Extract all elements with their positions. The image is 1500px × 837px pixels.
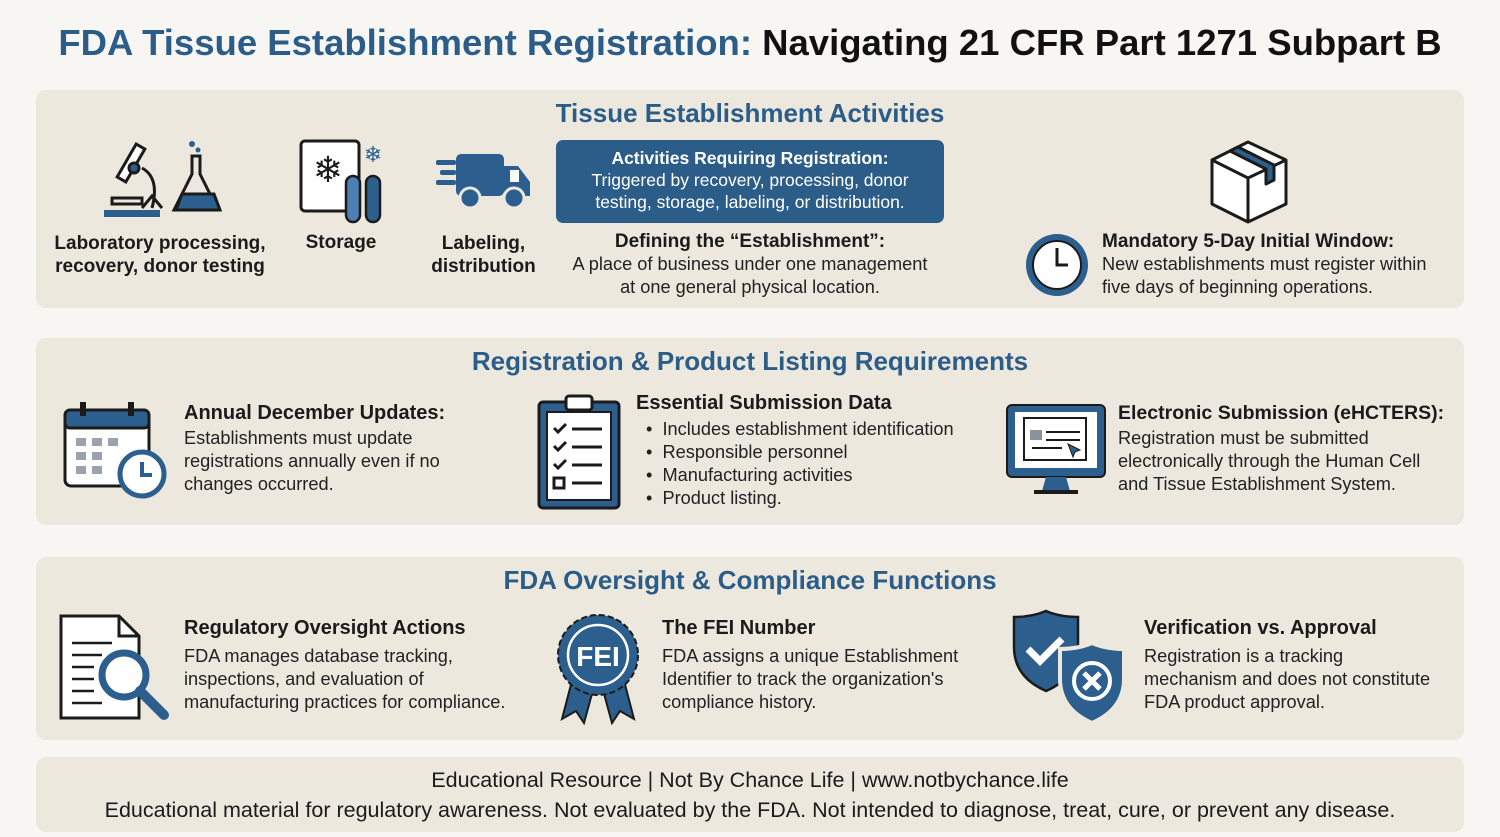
- text: FEI number: compliance history.: [662, 692, 816, 712]
- panel: tissue establishment activities: [36, 90, 1464, 308]
- label: labeling: [431, 233, 536, 277]
- text: 5-day window: New establishments must register within: [1102, 254, 1426, 274]
- callout: activities requiring registration: Activities Requiring Registration:: [611, 148, 889, 168]
- text: annual december updates: registrations annually even if no: [184, 451, 440, 471]
- callout: activities requiring registration: [556, 140, 944, 223]
- footer: Educational material for regulatory awareness. Not evaluated by the FDA. Not intended to diagnose, treat, cure, or prevent any disease.: [105, 798, 1395, 822]
- icon: storage freezer: [300, 140, 382, 224]
- text: essential submission data: • Includes establishment identification: [646, 419, 954, 439]
- text: verification vs approval: FDA product approval.: [1144, 692, 1325, 712]
- title: FDA Tissue Establishment Registration: Navigating 21 CFR Part 1271 Subpart B: [58, 22, 1442, 63]
- label: labeling: Labeling,: [442, 233, 525, 254]
- icon: delivery truck: [436, 154, 530, 206]
- icon: FEI badge: [557, 614, 639, 725]
- text: regulatory oversight actions: [184, 617, 505, 712]
- icon: shields check and cross: [1012, 610, 1122, 721]
- footer: [36, 757, 1464, 832]
- text: 5-day window: Mandatory 5-Day Initial Window:: [1102, 231, 1394, 252]
- text: regulatory oversight actions: inspections, and evaluation of: [184, 669, 424, 689]
- text: annual december updates: [184, 402, 445, 494]
- text: verification vs approval: mechanism and does not constitute: [1144, 669, 1430, 689]
- text: annual december updates: changes occurred.: [184, 474, 334, 494]
- label: laboratory: [54, 233, 266, 277]
- text: verification vs approval: Verification vs. Approval: [1144, 617, 1377, 639]
- text: electronic submission: [1118, 402, 1444, 494]
- label: labeling: distribution: [431, 256, 536, 277]
- text: annual december updates: Annual December Updates:: [184, 402, 445, 424]
- text: 5-day window: five days of beginning operations.: [1102, 277, 1373, 297]
- text: essential submission data: [636, 392, 954, 508]
- icon: clock: [1026, 234, 1088, 296]
- text: verification vs approval: [1144, 617, 1430, 712]
- icon: computer monitor: [1006, 404, 1106, 494]
- text: essential submission data: Essential Submission Data: [636, 392, 892, 414]
- text: electronic submission: electronically through the Human Cell: [1118, 451, 1420, 471]
- panel: FDA oversight & compliance: [36, 557, 1464, 740]
- text: regulatory oversight actions: Regulatory Oversight Actions: [184, 617, 466, 639]
- icon: microscope and flask: [104, 141, 222, 217]
- text: FEI number: Identifier to track the organization's: [662, 669, 944, 689]
- text: FEI number: [662, 617, 958, 712]
- icon: document with magnifier: [60, 614, 169, 720]
- heading: FDA Oversight & Compliance Functions: [503, 565, 997, 595]
- callout: activities requiring registration: Triggered by recovery, processing, donor: [591, 170, 909, 190]
- text: defining establishment: [572, 231, 928, 297]
- text: defining establishment: A place of business under one management: [573, 254, 927, 274]
- label: laboratory: Laboratory processing,: [54, 233, 266, 254]
- footer: Educational Resource | Not By Chance Life | www.notbychance.life: [431, 768, 1069, 792]
- text: essential submission data: • Product listing.: [646, 488, 782, 508]
- text: electronic submission: Registration must be submitted: [1118, 428, 1369, 448]
- icon: clipboard checklist: [538, 394, 620, 510]
- label: storage: Storage: [306, 232, 376, 253]
- text: 5-day window: [1102, 231, 1426, 297]
- panel: registration & product listing: [36, 338, 1464, 525]
- text: regulatory oversight actions: FDA manages database tracking,: [184, 646, 453, 666]
- text: FEI number: FDA assigns a unique Establishment: [662, 646, 958, 666]
- icon: FEI badge: FEI: [576, 641, 620, 672]
- text: annual december updates: Establishments must update: [184, 428, 412, 448]
- icon: box: [1210, 140, 1288, 224]
- label: laboratory: recovery, donor testing: [55, 256, 265, 277]
- text: defining establishment: at one general physical location.: [620, 277, 880, 297]
- icon: calendar: [64, 402, 166, 498]
- icon: storage freezer: ❄: [364, 142, 382, 167]
- text: FEI number: The FEI Number: [662, 617, 815, 639]
- text: electronic submission: Electronic Submission (eHCTERS):: [1118, 402, 1444, 424]
- text: verification vs approval: Registration is a tracking: [1144, 646, 1343, 666]
- text: defining establishment: Defining the “Establishment”:: [615, 231, 885, 252]
- text: essential submission data: • Manufacturing activities: [646, 465, 853, 485]
- text: essential submission data: • Responsible personnel: [646, 442, 848, 462]
- text: regulatory oversight actions: manufacturing practices for compliance.: [184, 692, 505, 712]
- text: electronic submission: and Tissue Establishment System.: [1118, 474, 1396, 494]
- heading: Registration & Product Listing Requirements: [472, 346, 1028, 376]
- callout: activities requiring registration: testing, storage, labeling, or distribution.: [595, 192, 905, 212]
- heading: Tissue Establishment Activities: [556, 98, 944, 128]
- icon: storage freezer: ❄: [313, 149, 343, 190]
